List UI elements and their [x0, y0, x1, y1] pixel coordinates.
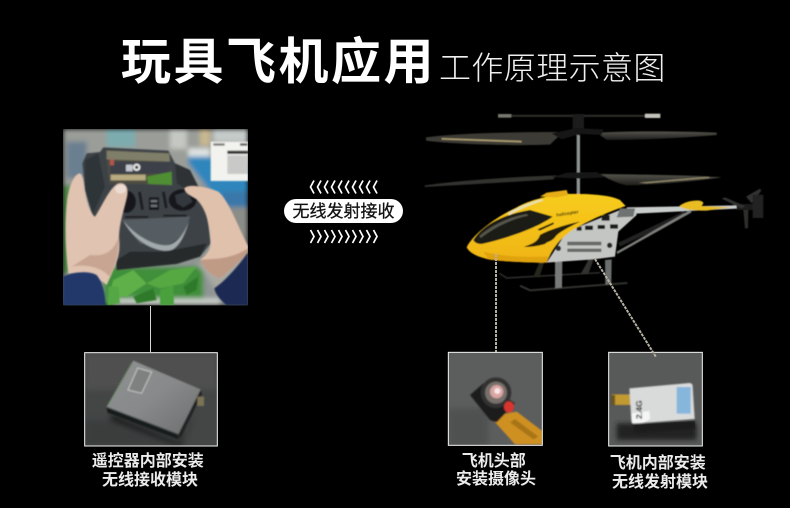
yellow fuselage: helicopter [556, 209, 579, 218]
connector: controller to receiver module [150, 306, 151, 352]
panel: camera [448, 352, 542, 488]
upper rotor [426, 128, 717, 145]
wireless transmit and receive indicator [284, 180, 403, 243]
joysticks and switches [123, 190, 136, 214]
title [121, 34, 666, 90]
helicopter [425, 114, 763, 290]
title: 玩具飞机应用 [121, 34, 436, 90]
tail rotor [722, 189, 763, 228]
yellow fuselage [467, 190, 626, 263]
controller screen [107, 160, 157, 184]
sleeves [63, 253, 248, 305]
landing skids [499, 259, 627, 290]
pointer: transmitter module to helicopter body [595, 259, 656, 357]
pointer: camera to helicopter nose [495, 254, 497, 352]
caption: 飞机内部安装 [610, 453, 706, 472]
module board [107, 408, 178, 439]
cockpit window [473, 210, 553, 244]
subtitle: 工作原理示意图 [439, 50, 666, 86]
flybar [498, 114, 660, 131]
white info panel [211, 142, 248, 181]
camera body [470, 383, 515, 422]
metal body [547, 208, 637, 263]
panel: transmitter module [609, 352, 710, 491]
tail boom and struts [617, 201, 737, 254]
foliage [107, 267, 198, 305]
lower rotor [425, 172, 722, 187]
caption: 遥控器内部安装 [92, 451, 204, 470]
right hand [184, 186, 248, 278]
label pill: 无线发射接收 [292, 202, 394, 221]
panel: transmitter module: 2.4G [634, 400, 644, 419]
chevrons right [310, 230, 377, 243]
mast [577, 135, 580, 198]
flame decal [524, 222, 580, 247]
caption: 无线接收模块 [102, 470, 198, 489]
module can [633, 420, 696, 430]
controller body [82, 147, 211, 270]
chevrons left [310, 180, 377, 194]
caption: 安装摄像头 [456, 469, 536, 488]
photo: hands holding remote controller [63, 129, 248, 305]
caption: 飞机头部 [462, 451, 526, 470]
left hand [66, 173, 128, 285]
panel: receiver module [85, 353, 217, 489]
flex cable [490, 412, 542, 444]
caption: 无线发射模块 [612, 472, 708, 491]
antenna connector [612, 394, 632, 405]
